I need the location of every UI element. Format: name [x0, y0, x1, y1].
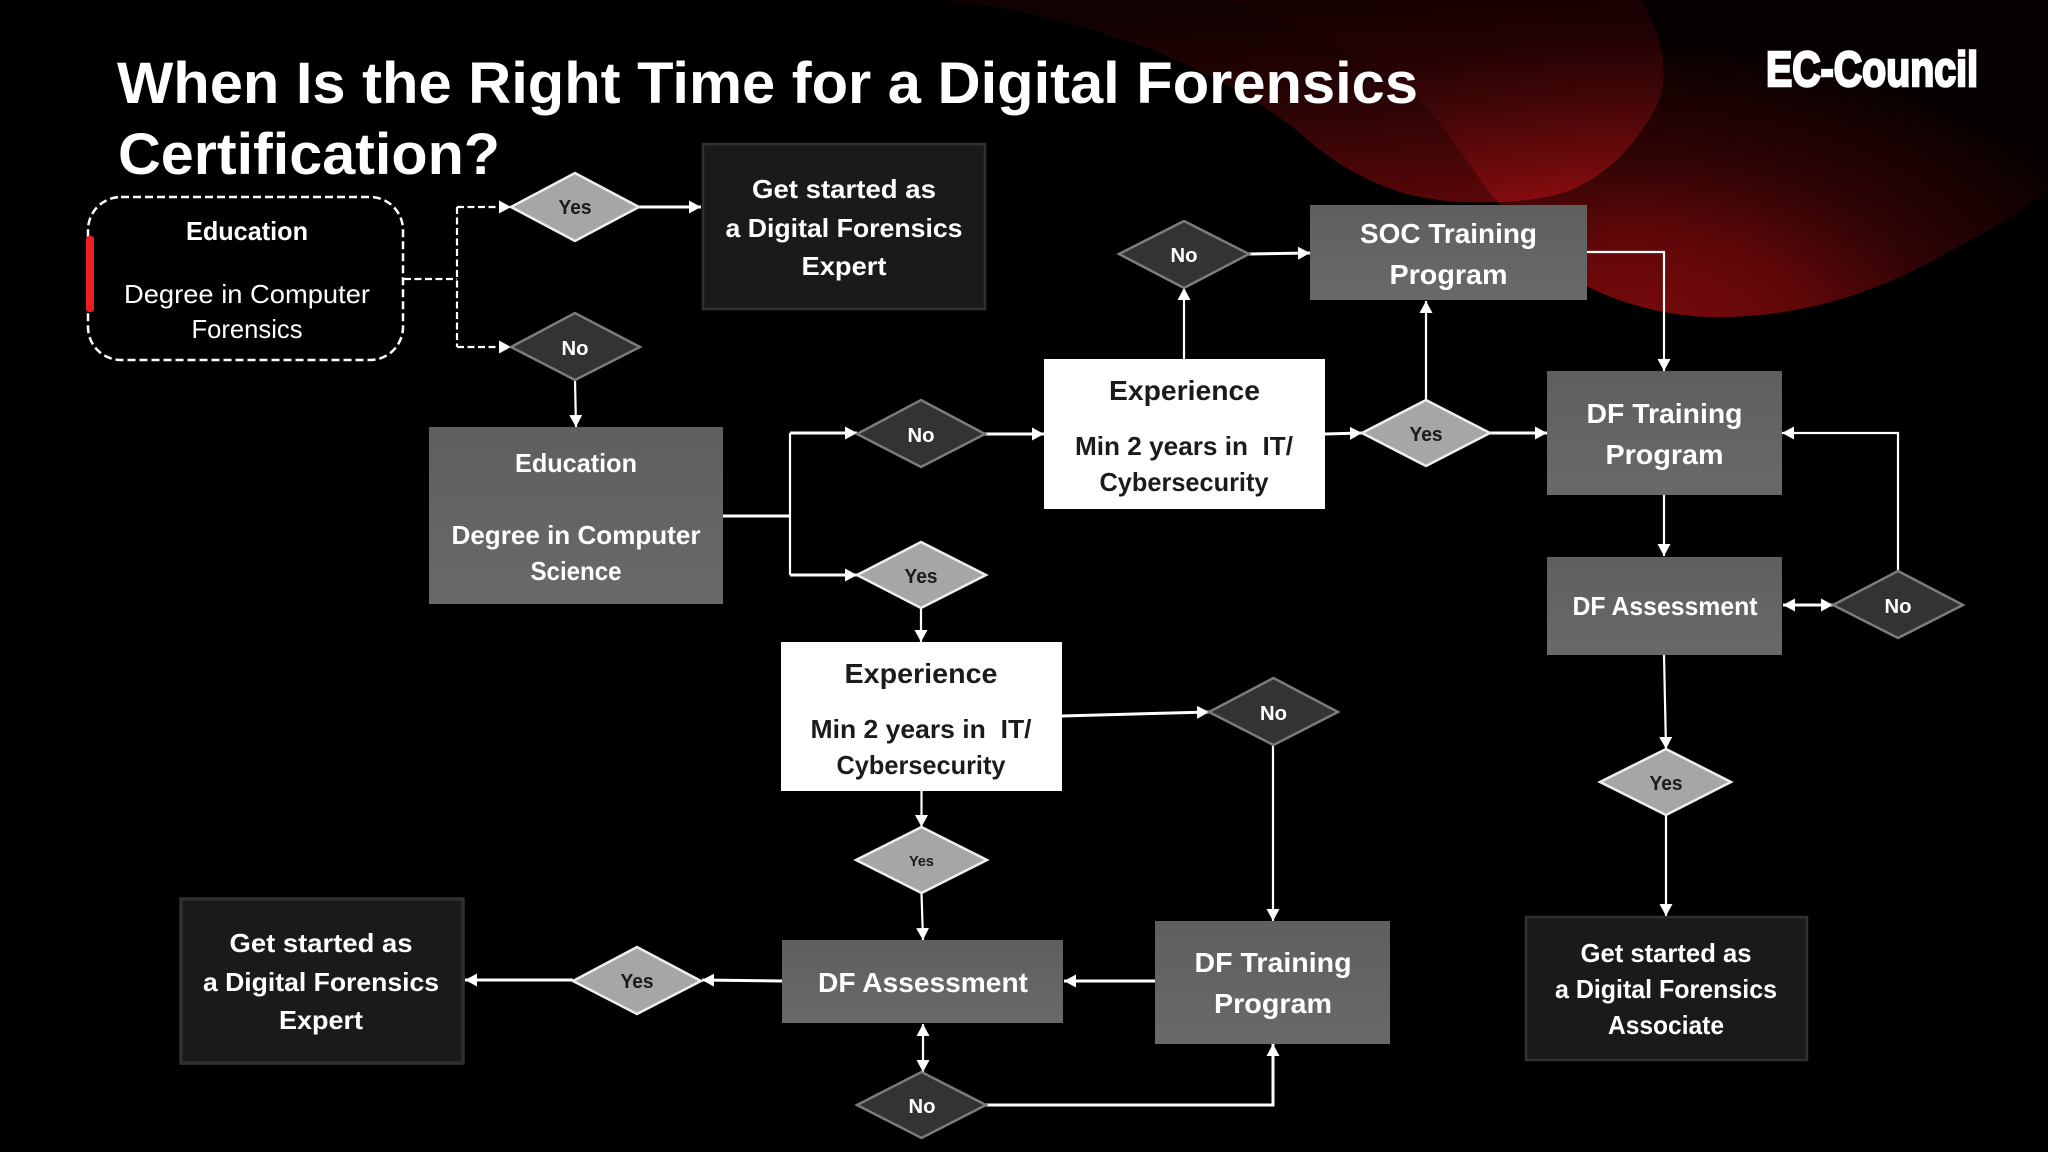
- outcome: digital forensics expert, top: Expert: [802, 251, 887, 281]
- panel: DF assessment, right: DF Assessment: [1572, 591, 1758, 621]
- outcome: digital forensics associate: a Digital Forensics: [1555, 974, 1777, 1004]
- panel: DF training program, right: Program: [1606, 439, 1724, 470]
- decision: no to experience: No: [908, 425, 934, 447]
- outcome: digital forensics associate: Associate: [1608, 1010, 1724, 1040]
- panel: education computer science: Science: [530, 556, 622, 586]
- decision: yes to expert, lower: [573, 947, 701, 1014]
- decision: no to DF training, lower: [1209, 678, 1338, 745]
- decision: no to computer science: No: [562, 338, 588, 360]
- decision: yes to associate: Yes: [1650, 773, 1682, 795]
- decision: no to experience: [857, 400, 985, 467]
- decision: yes to expert, lower: Yes: [620, 971, 654, 993]
- title: Certification?: [118, 122, 500, 187]
- panel: education computer science: Degree in Computer: [452, 520, 700, 550]
- panel: education computer forensics: [86, 197, 403, 360]
- decision: no to computer science: [511, 313, 640, 380]
- panel: experience, right branch: Cybersecurity: [1100, 467, 1269, 497]
- outcome: digital forensics expert, top: [703, 144, 985, 309]
- title: [117, 51, 1418, 187]
- red accent bar: [86, 236, 94, 312]
- decision: yes to associate: [1600, 749, 1731, 815]
- decision: no back to DF training, bottom: No: [908, 1096, 936, 1118]
- outcome: digital forensics associate: [1526, 917, 1807, 1060]
- panel: experience, lower branch: [781, 642, 1062, 791]
- background red wave: [945, 0, 2048, 317]
- panel: DF assessment, lower: DF Assessment: [818, 967, 1028, 998]
- panel: education computer forensics: Degree in Computer: [124, 279, 370, 309]
- decision: no to SOC training: [1119, 221, 1249, 288]
- outcome: digital forensics expert, top: Get started as: [752, 174, 936, 204]
- panel: education computer science: Education: [515, 448, 637, 478]
- panel: experience, right branch: Experience: [1109, 375, 1260, 406]
- decision: no back to DF training: No: [1884, 596, 1912, 618]
- decision: no to SOC training: No: [1170, 245, 1198, 267]
- outcome: digital forensics expert, lower: a Digital Forensics: [203, 967, 439, 997]
- panel: experience, right branch: [1044, 359, 1325, 509]
- decision: yes to expert: Yes: [558, 197, 592, 219]
- outcome: digital forensics expert, top: a Digital Forensics: [726, 213, 962, 243]
- panel: education computer forensics: Forensics: [192, 314, 302, 344]
- decision: yes to experience: Yes: [904, 566, 938, 588]
- panel: education computer forensics: Education: [186, 216, 308, 246]
- panel: education computer science: [429, 427, 723, 604]
- panel: DF training program, right: [1547, 371, 1782, 495]
- logo: EC-Council: EC-Council: [1766, 43, 1978, 97]
- panel: SOC training program: SOC Training: [1360, 218, 1537, 249]
- panel: DF assessment, right: [1547, 557, 1782, 655]
- decision: small yes to DF assessment: [856, 827, 987, 893]
- panel: DF assessment, lower: [782, 940, 1063, 1023]
- panel: DF training program, lower: DF Training: [1194, 947, 1352, 978]
- decision: yes to DF training: Yes: [1410, 424, 1442, 446]
- decision: yes to experience: [857, 542, 986, 608]
- decision: no back to DF training: [1833, 571, 1963, 638]
- title: When Is the Right Time for a Digital Forensics: [117, 51, 1418, 116]
- panel: SOC training program: [1310, 205, 1587, 300]
- connector arrows: [404, 207, 1898, 1105]
- panel: DF training program, right: DF Training: [1586, 398, 1742, 429]
- panel: SOC training program: Program: [1390, 259, 1508, 290]
- decision: yes to expert: [511, 173, 639, 241]
- panel: experience, lower branch: Min 2 years in IT/: [810, 714, 1032, 744]
- outcome: digital forensics expert, lower: [181, 899, 463, 1063]
- outcome: digital forensics expert, lower: Expert: [279, 1005, 363, 1035]
- outcome: digital forensics expert, lower: Get started as: [230, 928, 412, 958]
- decision: small yes to DF assessment: Yes: [909, 853, 934, 870]
- panel: experience, right branch: Min 2 years in IT/: [1075, 431, 1293, 461]
- outcome: digital forensics associate: Get started as: [1580, 938, 1752, 968]
- panel: DF training program, lower: [1155, 921, 1390, 1044]
- panel: experience, lower branch: Experience: [844, 658, 998, 689]
- decision: no back to DF training, bottom: [857, 1072, 986, 1138]
- decision: no to DF training, lower: No: [1260, 703, 1287, 725]
- panel: experience, lower branch: Cybersecurity: [836, 750, 1006, 780]
- decision: yes to DF training: [1362, 400, 1490, 466]
- panel: DF training program, lower: Program: [1214, 988, 1332, 1019]
